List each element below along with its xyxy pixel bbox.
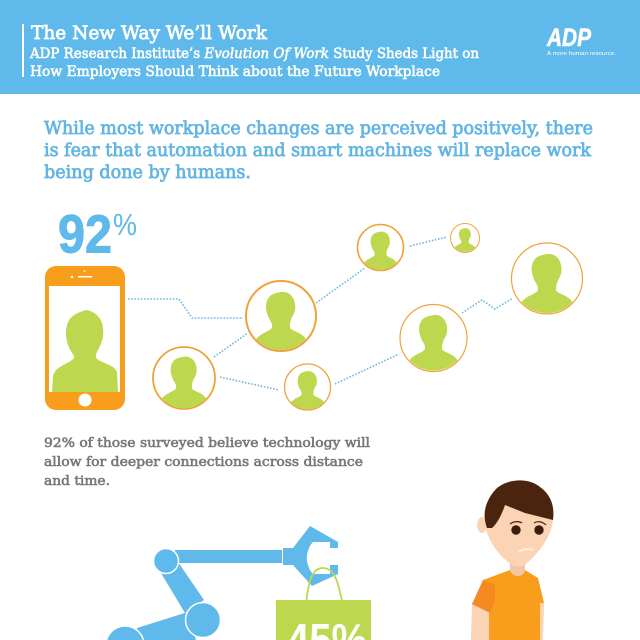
shirt xyxy=(483,570,544,640)
worried person illustration xyxy=(471,480,553,640)
body text xyxy=(44,436,370,489)
face xyxy=(484,490,553,566)
headline xyxy=(44,119,593,183)
ADP logo: A more human resource. xyxy=(547,51,617,57)
eyebrows xyxy=(510,522,546,525)
person circle 4 xyxy=(358,224,404,270)
title: The New Way We’ll Work xyxy=(31,23,268,44)
ear xyxy=(477,517,487,533)
ADP logo xyxy=(546,24,617,57)
robot arm xyxy=(106,526,338,640)
body text: and time. xyxy=(44,474,110,489)
icon: smartphone with person xyxy=(45,266,125,410)
92% statistic: 92 xyxy=(58,204,112,264)
headline: is fear that automation and smart machines will replace work xyxy=(44,141,591,161)
robot claw xyxy=(283,526,338,586)
person circle 1 xyxy=(246,281,316,351)
hair xyxy=(485,480,553,528)
subtitle: How Employers Should Think about the Future Workplace xyxy=(30,64,440,80)
person circle 5 xyxy=(450,224,480,252)
body text: allow for deeper connections across distance xyxy=(44,455,363,470)
arms xyxy=(471,603,489,640)
shopping bag with 45% xyxy=(276,568,371,640)
body text: 92% of those surveyed believe technology will xyxy=(44,436,370,451)
left sleeve xyxy=(472,580,495,613)
dotted connection lines xyxy=(128,237,513,390)
neck xyxy=(510,555,525,577)
92% statistic: % xyxy=(113,207,137,242)
ADP logo: ADP xyxy=(546,24,591,52)
eyes xyxy=(511,525,521,535)
mouth xyxy=(519,549,533,552)
person circle 7 xyxy=(512,243,582,314)
person circle 6 xyxy=(400,304,467,372)
headline: being done by humans. xyxy=(44,163,251,183)
subtitle xyxy=(29,46,479,80)
header banner xyxy=(0,0,640,94)
person circle 3 xyxy=(284,364,330,410)
headline: While most workplace changes are perceived positively, there xyxy=(44,119,593,139)
subtitle: ADP Research Institute’s Evolution Of Work Study Sheds Light on xyxy=(29,46,479,62)
person circle 2 xyxy=(153,347,215,409)
